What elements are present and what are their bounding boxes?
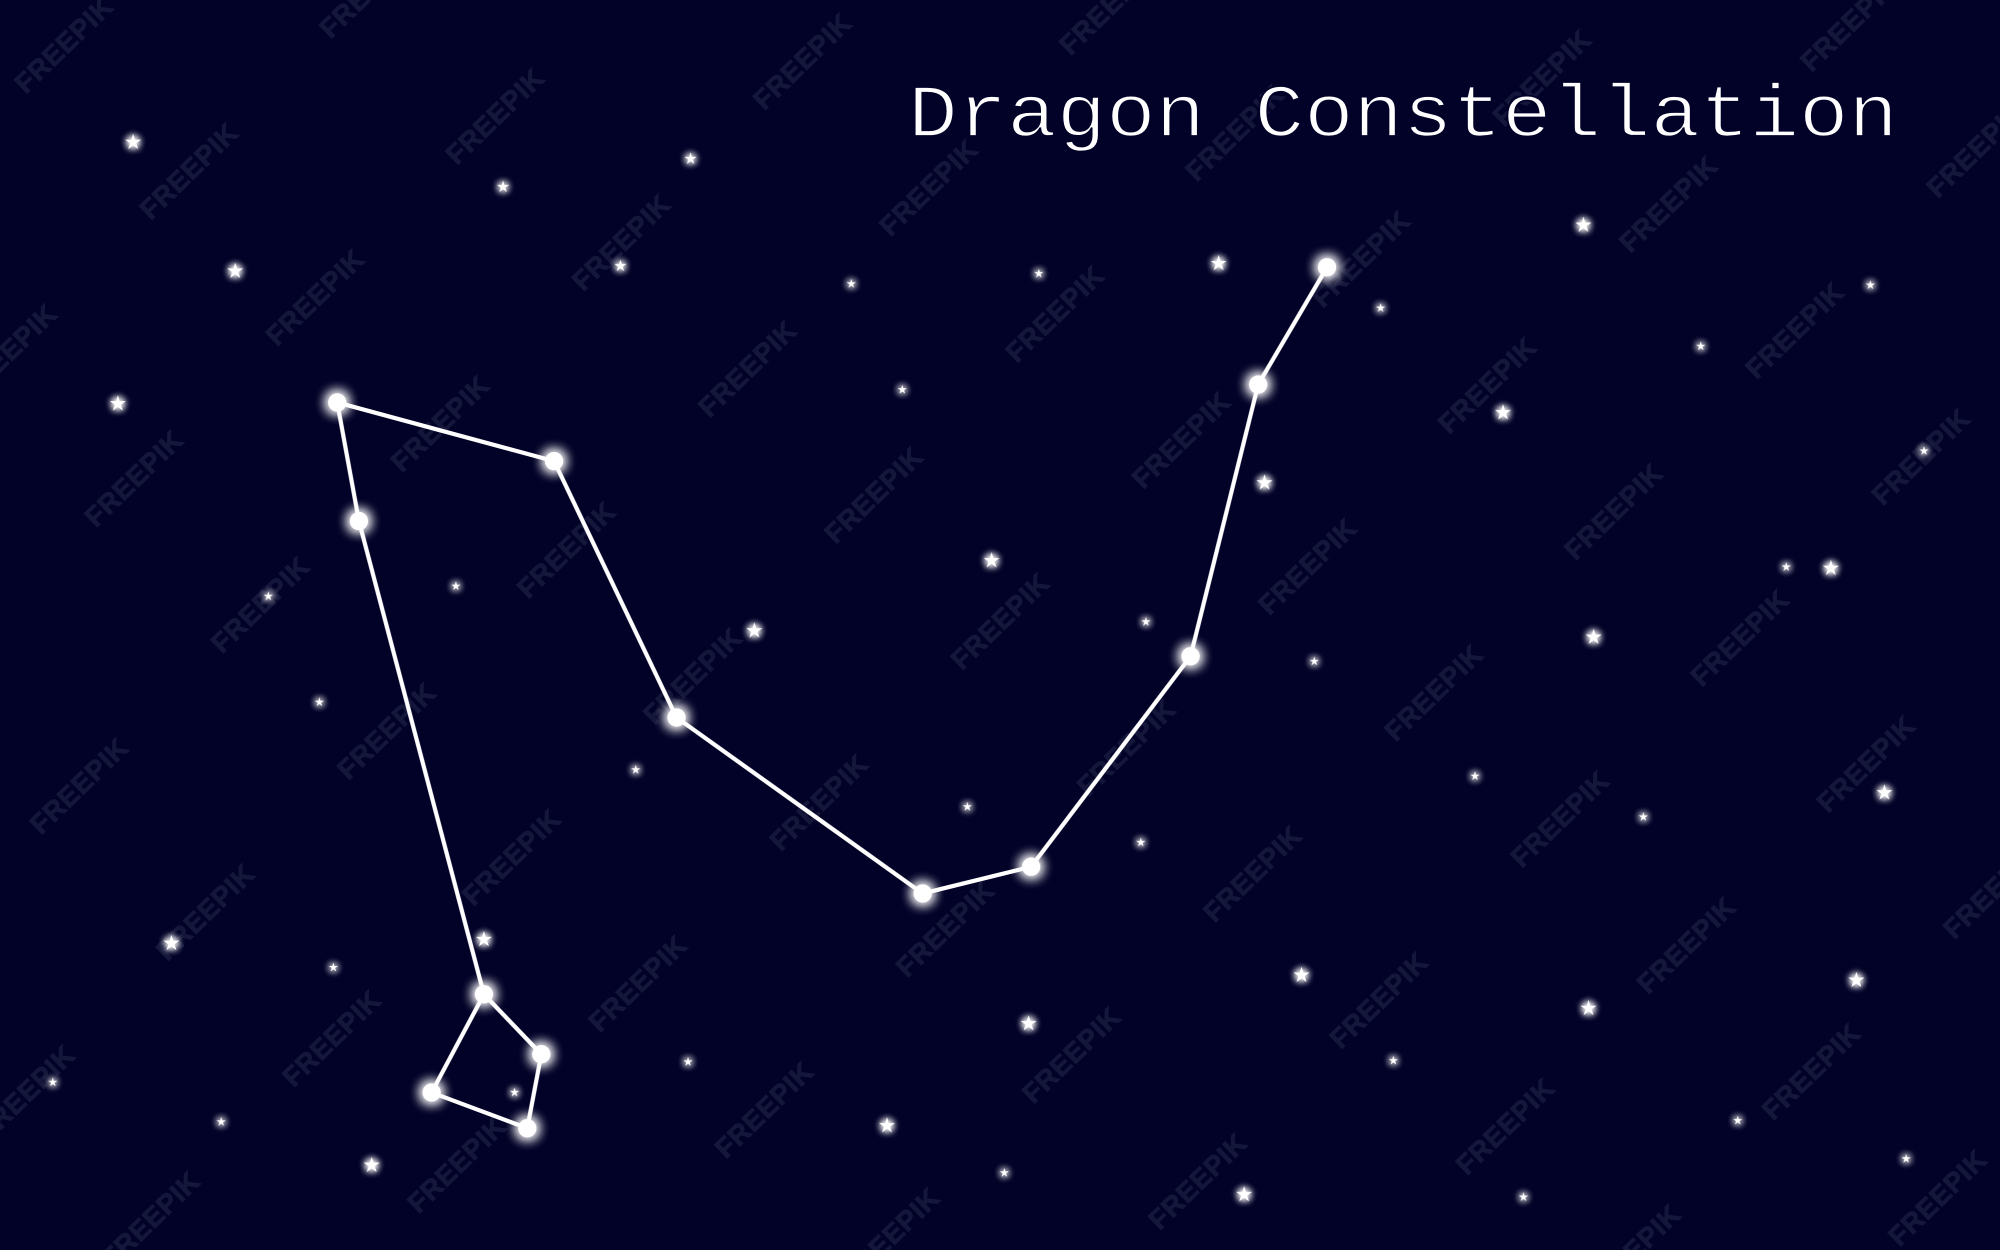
watermark pattern: FREEPIK bbox=[763, 748, 874, 857]
watermark pattern: FREEPIK bbox=[1558, 457, 1669, 566]
watermark pattern: FREEPIK bbox=[1323, 946, 1434, 1054]
watermark pattern: FREEPIK bbox=[890, 874, 1001, 983]
dragon constellation bbox=[328, 258, 1336, 1137]
watermark pattern: FREEPIK bbox=[582, 929, 693, 1038]
watermark pattern: FREEPIK bbox=[1631, 891, 1742, 999]
watermark pattern: FREEPIK bbox=[133, 117, 244, 225]
watermark pattern: FREEPIK bbox=[1866, 402, 1976, 511]
watermark pattern: FREEPIK bbox=[1179, 78, 1290, 187]
watermark pattern: FREEPIK bbox=[260, 243, 370, 351]
watermark pattern: FREEPIK bbox=[1487, 24, 1598, 132]
watermark pattern: FREEPIK bbox=[747, 7, 858, 115]
watermark pattern: FREEPIK bbox=[1684, 583, 1795, 692]
watermark pattern: FREEPIK bbox=[1252, 512, 1363, 621]
watermark pattern: FREEPIK bbox=[945, 567, 1055, 675]
watermark pattern: FREEPIK bbox=[79, 424, 189, 533]
watermark pattern: FREEPIK bbox=[1505, 765, 1615, 873]
watermark pattern: FREEPIK bbox=[511, 495, 622, 604]
watermark pattern: FREEPIK bbox=[1378, 638, 1489, 747]
watermark pattern: FREEPIK bbox=[566, 188, 677, 297]
watermark pattern: FREEPIK bbox=[456, 803, 567, 911]
constellation glow nodes bbox=[328, 258, 1336, 1137]
watermark pattern: FREEPIK bbox=[1071, 693, 1182, 802]
watermark pattern: FREEPIK bbox=[1016, 1001, 1127, 1109]
watermark pattern: FREEPIK bbox=[1756, 1017, 1867, 1126]
watermark pattern: FREEPIK bbox=[1739, 276, 1850, 385]
title: Dragon Constellation bbox=[908, 75, 1898, 159]
watermark pattern: FREEPIK bbox=[205, 550, 316, 659]
watermark pattern: FREEPIK bbox=[24, 731, 134, 840]
watermark pattern: FREEPIK bbox=[1197, 819, 1308, 928]
watermark pattern: FREEPIK bbox=[692, 314, 803, 423]
watermark pattern: FREEPIK bbox=[999, 260, 1110, 368]
watermark pattern: FREEPIK bbox=[439, 62, 550, 170]
watermark pattern: FREEPIK bbox=[637, 622, 748, 730]
watermark pattern: FREEPIK bbox=[1432, 331, 1543, 439]
constellation lines bbox=[337, 267, 1327, 1128]
watermark pattern: FREEPIK bbox=[1142, 1127, 1253, 1235]
watermark pattern: FREEPIK bbox=[1811, 710, 1921, 818]
watermark pattern: FREEPIK bbox=[873, 133, 984, 242]
watermark pattern: FREEPIK bbox=[1306, 205, 1416, 313]
watermark pattern: FREEPIK bbox=[1613, 150, 1724, 258]
watermark pattern: FREEPIK bbox=[709, 1055, 819, 1164]
watermark pattern: FREEPIK bbox=[818, 441, 929, 549]
watermark pattern: FREEPIK bbox=[1882, 1143, 1993, 1250]
watermark pattern: FREEPIK bbox=[385, 369, 495, 478]
watermark pattern: FREEPIK bbox=[331, 677, 442, 785]
watermark pattern: FREEPIK bbox=[1126, 386, 1237, 494]
watermark pattern: FREEPIK bbox=[150, 858, 261, 966]
watermark pattern: FREEPIK bbox=[276, 984, 387, 1093]
watermark pattern: FREEPIK bbox=[1450, 1072, 1561, 1181]
watermark pattern: FREEPIK bbox=[401, 1110, 512, 1219]
